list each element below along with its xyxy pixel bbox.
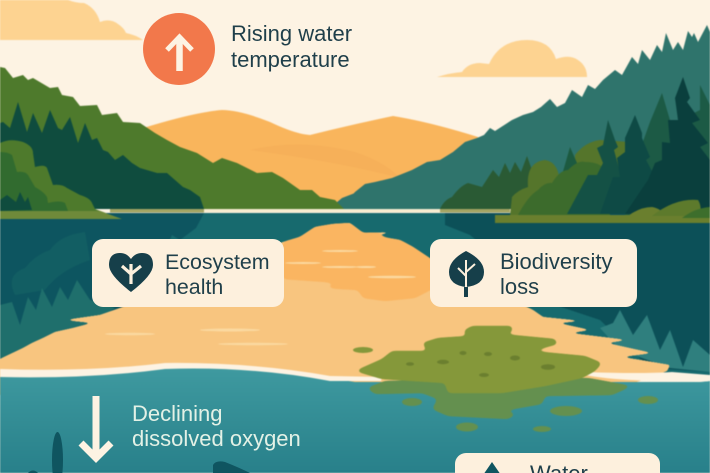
distant mountains [140, 110, 478, 212]
left tree reflection [0, 280, 115, 362]
left cloud [0, 0, 143, 40]
algae bloom lower [367, 378, 632, 419]
left water reflection [0, 213, 204, 362]
text: declining dissolved oxygen: Declining [132, 401, 222, 426]
icon: water drop [481, 462, 503, 473]
icon: leaf with branches [449, 251, 484, 297]
text: declining dissolved oxygen: dissolved oxygen [132, 426, 301, 451]
card: biodiversity loss: Biodiversity [500, 249, 612, 274]
left bush reflection [12, 232, 90, 295]
heading: rising water temperature: Rising water [231, 21, 352, 46]
orange reflection [283, 223, 440, 301]
algae bloom upper [355, 326, 602, 393]
algae spots [406, 351, 555, 377]
seaweed silhouettes [28, 432, 250, 473]
icon: declining oxygen arrow [81, 396, 111, 458]
lower lake [0, 367, 710, 473]
left bushes [0, 140, 122, 219]
left dark conifers [0, 102, 204, 209]
icon: heart with branch [109, 253, 153, 292]
right water reflection [445, 213, 710, 372]
far tree line [330, 193, 355, 208]
card: ecosystem health: health [165, 275, 223, 299]
lake surface [0, 213, 710, 378]
card: ecosystem health [92, 239, 284, 307]
water ripples [105, 250, 416, 345]
shoreline strip [0, 209, 510, 219]
algae patches [402, 396, 658, 432]
algae small patch on sand [353, 347, 373, 353]
right hillside [340, 25, 710, 209]
shoreline foam [0, 363, 382, 381]
right cloud [437, 40, 587, 77]
card: biodiversity loss: loss [500, 274, 539, 299]
heading: rising water temperature: temperature [231, 47, 350, 72]
right forest [440, 77, 710, 223]
right tree reflection [600, 310, 710, 372]
sand reflection [0, 223, 670, 395]
icon: rising temperature arrow [143, 13, 215, 85]
card: biodiversity loss [430, 239, 637, 307]
card: ecosystem health: Ecosystem [165, 250, 270, 274]
mountain shadow band [250, 144, 400, 178]
card: water [455, 453, 660, 473]
left hillside [0, 67, 344, 209]
